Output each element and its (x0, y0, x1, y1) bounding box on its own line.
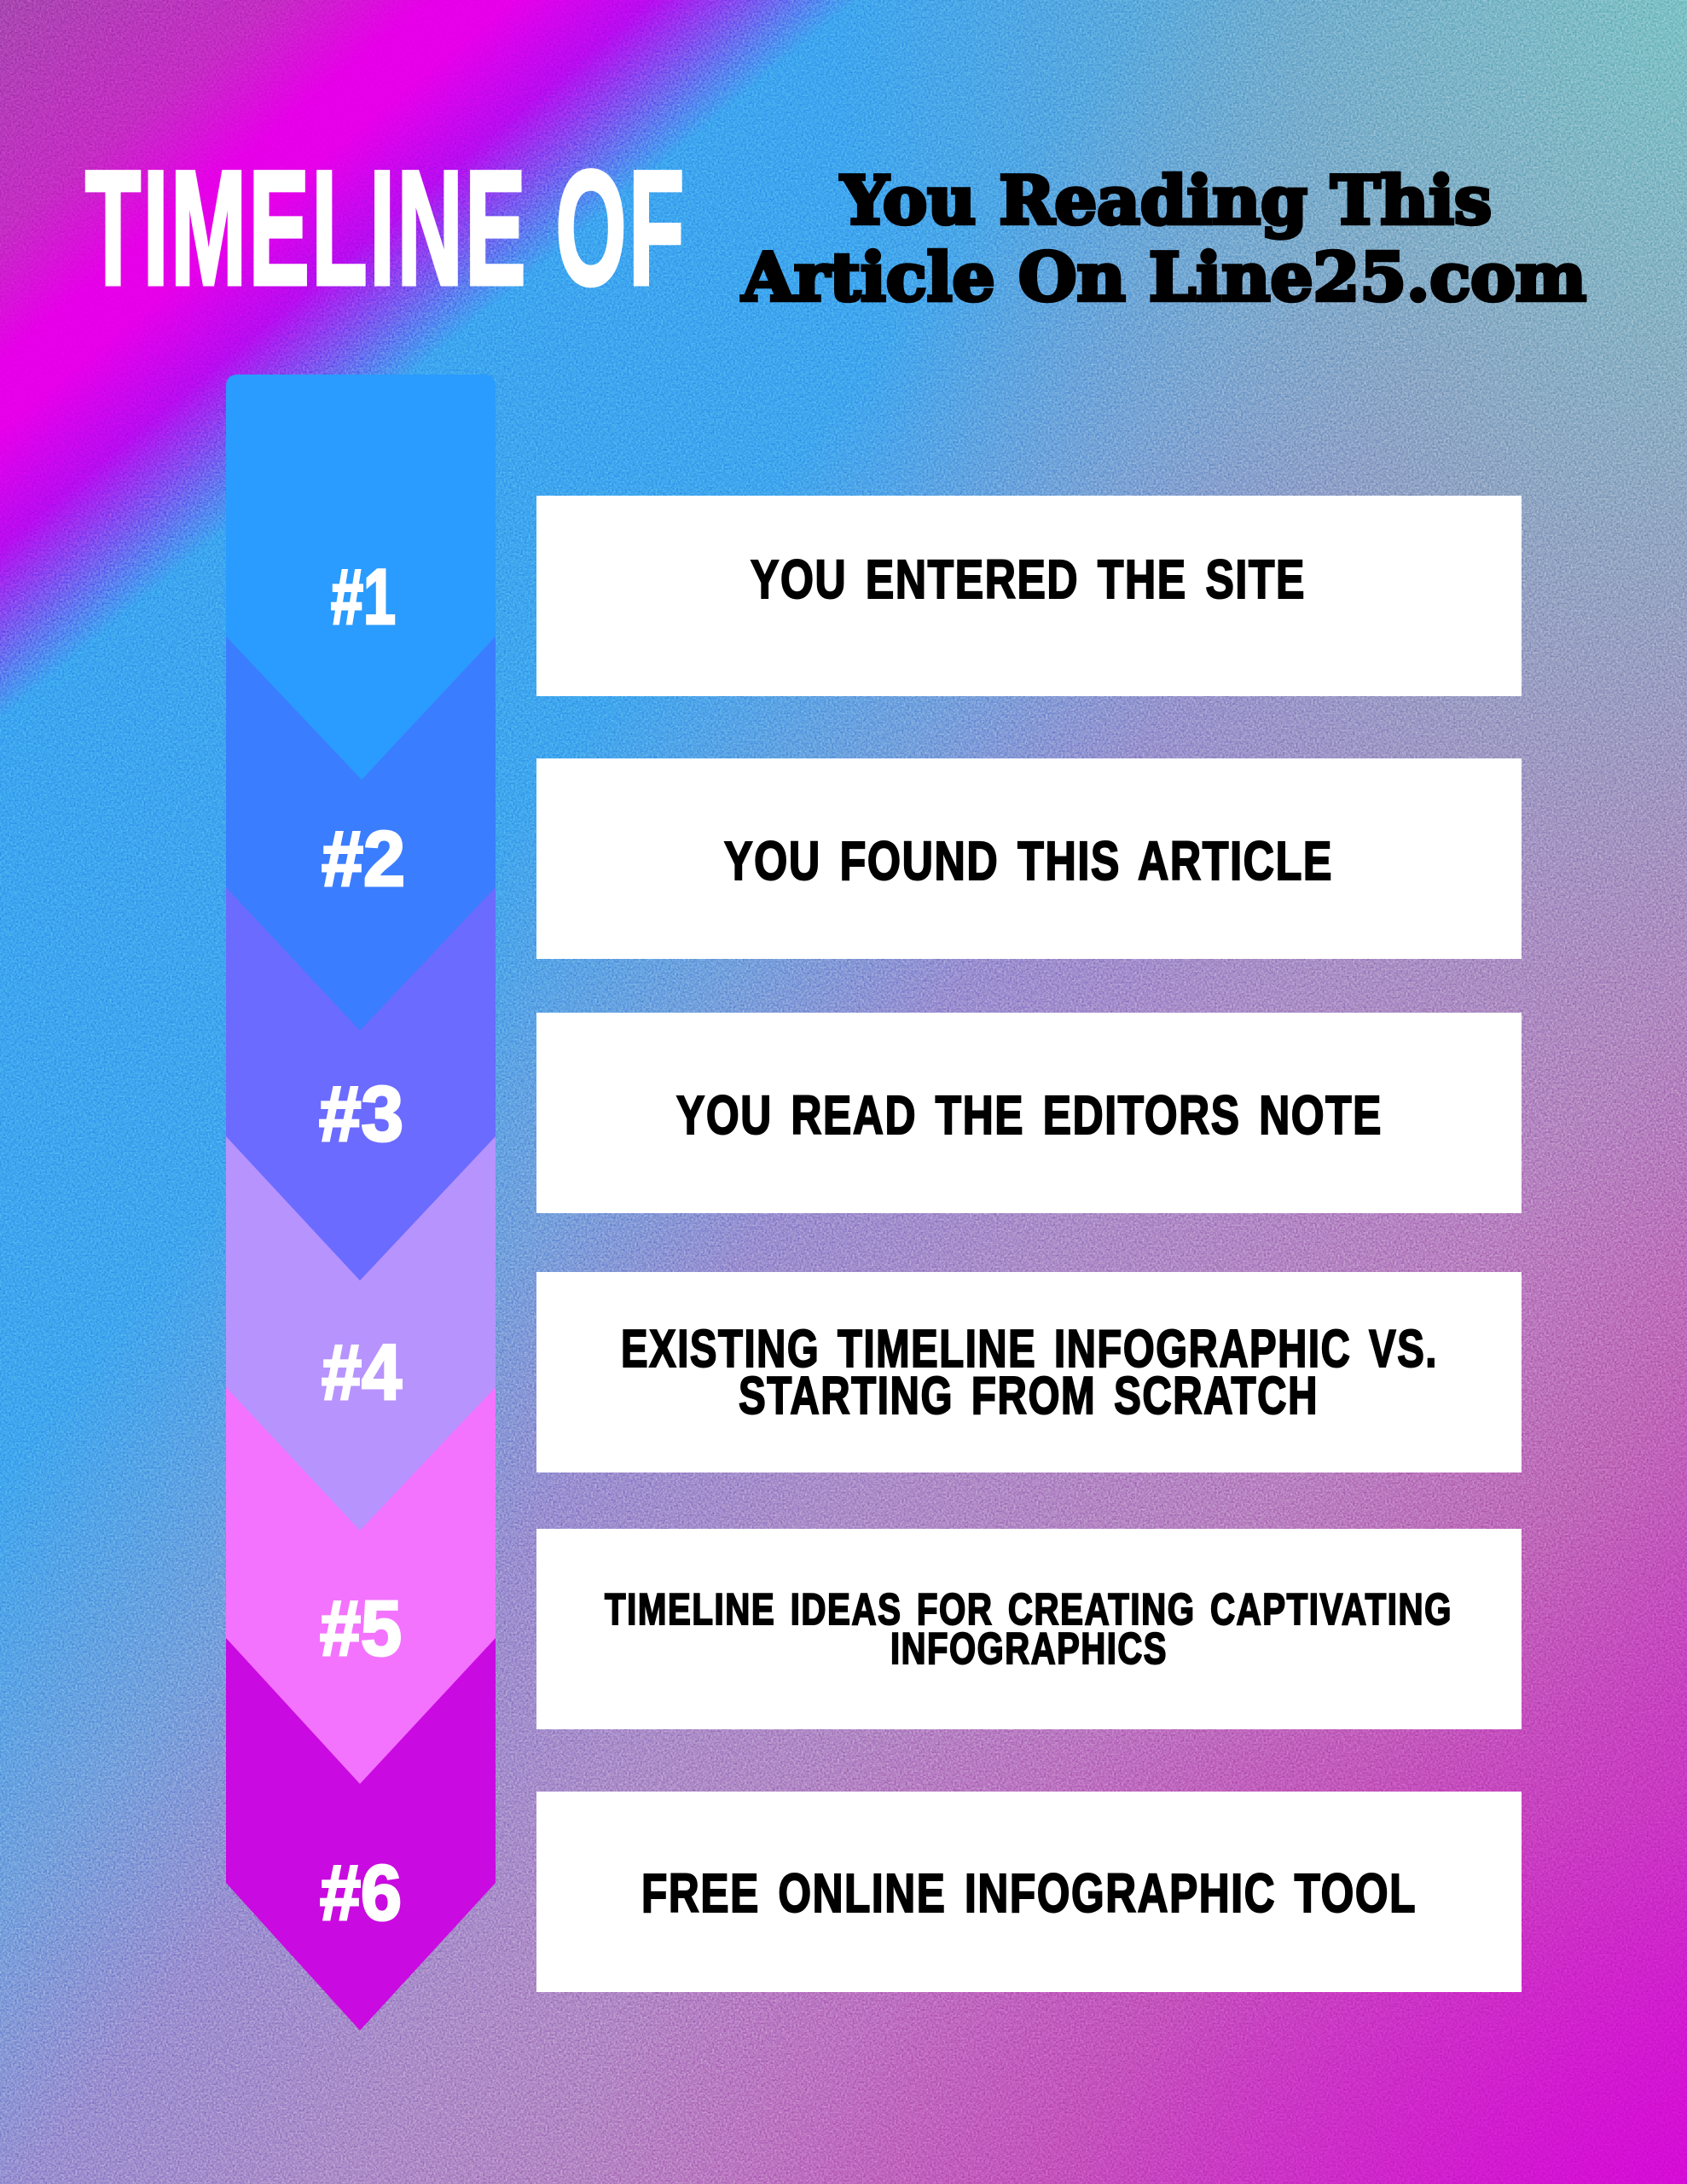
card 5: TIMELINE IDEAS FOR CREATING CAPTIVATING (605, 1585, 1452, 1635)
card 5 (536, 1529, 1522, 1729)
card 4: STARTING FROM SCRATCH (739, 1367, 1319, 1426)
number 5: #5 (320, 1585, 402, 1672)
card 2 (536, 758, 1522, 959)
step 3 chevron (226, 853, 496, 1281)
card 3 (536, 1013, 1522, 1213)
subtitle: You Reading This Article On Line25.com (741, 162, 1586, 317)
timeline arrow column (226, 375, 496, 2030)
card 1 (536, 496, 1522, 696)
card 1: YOU ENTERED THE SITE (751, 549, 1306, 610)
card 4: EXISTING TIMELINE INFOGRAPHIC VS. (621, 1320, 1438, 1379)
subtitle: You Reading This Article On Line25.com: Article On Line25.com (741, 239, 1586, 317)
card 2: YOU FOUND THIS ARTICLE (724, 830, 1333, 892)
step 1 chevron (226, 375, 496, 780)
card 6: FREE ONLINE INFOGRAPHIC TOOL (641, 1862, 1417, 1924)
title: Timeline of: TIMELINE OF (85, 137, 687, 319)
number 3: #3 (319, 1071, 403, 1158)
step 5 chevron (226, 1365, 496, 1784)
number 2: #2 (322, 816, 405, 903)
card 5: INFOGRAPHICS (890, 1624, 1168, 1674)
number 4: #4 (322, 1329, 402, 1416)
card 6 (536, 1792, 1522, 1992)
number 6: #6 (320, 1850, 402, 1937)
step 4 chevron (226, 1109, 496, 1531)
card 3: YOU READ THE EDITORS NOTE (676, 1084, 1383, 1146)
step numbers (319, 554, 405, 1937)
step cards (536, 496, 1522, 1992)
subtitle: You Reading This Article On Line25.com: You Reading This (840, 162, 1492, 240)
step 6 chevron (226, 1621, 496, 2030)
step 2 chevron (226, 597, 496, 1031)
number 1: #1 (331, 554, 396, 641)
card 4 (536, 1272, 1522, 1472)
